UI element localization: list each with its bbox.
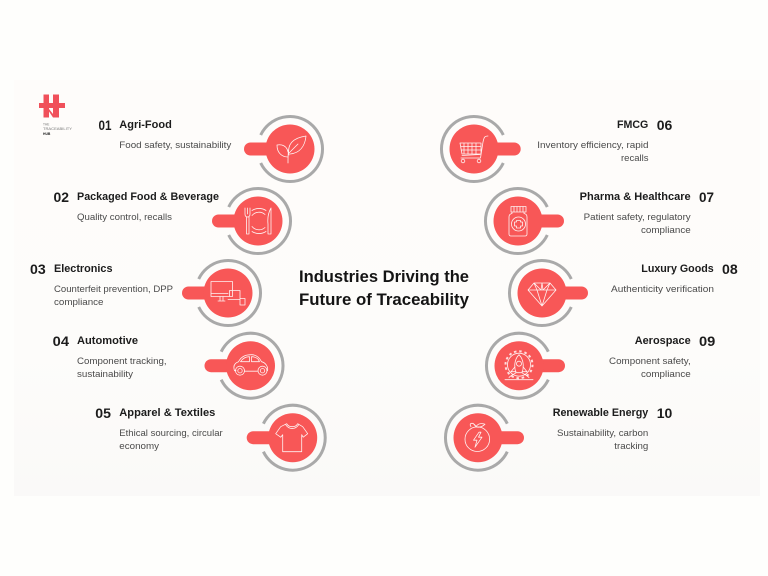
item 07: Pharma & Healthcare: Pharma & Healthcare bbox=[580, 191, 691, 203]
item 04: Automotive: sustainability bbox=[77, 369, 133, 380]
item 05: Apparel & Textiles bbox=[95, 405, 325, 470]
icon: rocket in gear bbox=[486, 333, 565, 398]
icon: t-shirt bbox=[247, 405, 325, 470]
item 10: Renewable Energy: Renewable Energy bbox=[553, 407, 649, 419]
icon: plate and cutlery bbox=[212, 188, 291, 254]
item 10: Renewable Energy bbox=[445, 405, 672, 470]
logo: The Traceability Hub: TRACEABILITY bbox=[43, 127, 73, 131]
item 07: Pharma & Healthcare bbox=[485, 188, 714, 254]
item 09: Aerospace: compliance bbox=[641, 369, 691, 380]
item 05: Apparel & Textiles: Apparel & Textiles bbox=[119, 407, 215, 419]
item 01: Agri-Food: Food safety, sustainability bbox=[119, 140, 232, 151]
item 02: Packaged Food & Beverage: Packaged Food & Beverage bbox=[77, 191, 219, 203]
item 09: Aerospace: 09 bbox=[699, 333, 716, 349]
item 07: Pharma & Healthcare: compliance bbox=[641, 225, 691, 236]
item 10: Renewable Energy: tracking bbox=[614, 441, 648, 452]
item 02: Packaged Food & Beverage bbox=[54, 188, 291, 254]
title bbox=[299, 268, 470, 309]
item 04: Automotive: Component tracking, bbox=[77, 356, 167, 367]
item 08: Luxury Goods bbox=[509, 260, 738, 326]
icon: car bbox=[204, 333, 283, 398]
item 09: Aerospace: Aerospace bbox=[635, 335, 691, 347]
item 01: Agri-Food: 01 bbox=[98, 117, 112, 133]
icon: energy bolt in fruit bbox=[445, 405, 524, 470]
item 06: FMCG: recalls bbox=[621, 153, 649, 164]
item 04: Automotive: 04 bbox=[53, 333, 69, 349]
item 01: Agri-Food: Agri-Food bbox=[119, 119, 172, 131]
icon: diamond bbox=[509, 260, 588, 326]
item 05: Apparel & Textiles: economy bbox=[119, 441, 159, 452]
item 06: FMCG: FMCG bbox=[617, 119, 648, 131]
item 10: Renewable Energy: Sustainability, carbon bbox=[557, 428, 648, 439]
logo: The Traceability Hub bbox=[39, 94, 73, 136]
item 06: FMCG: 06 bbox=[657, 117, 673, 133]
item 07: Pharma & Healthcare: 07 bbox=[699, 189, 714, 205]
logo: The Traceability Hub: HUB bbox=[43, 132, 51, 136]
item 03: Electronics: compliance bbox=[54, 297, 104, 308]
item 03: Electronics bbox=[30, 260, 261, 326]
item 01: Agri-Food bbox=[98, 116, 323, 182]
icon: shopping cart bbox=[441, 116, 521, 182]
item 03: Electronics: Electronics bbox=[54, 263, 112, 275]
item 05: Apparel & Textiles: Ethical sourcing, circular bbox=[119, 428, 223, 439]
item 08: Luxury Goods: 08 bbox=[722, 261, 738, 277]
item 08: Luxury Goods: Authenticity verification bbox=[611, 284, 714, 295]
item 04: Automotive bbox=[53, 333, 283, 398]
title: Industries Driving the bbox=[299, 268, 469, 286]
item 02: Packaged Food & Beverage: Quality control, recalls bbox=[77, 212, 172, 223]
background panel bbox=[14, 80, 760, 496]
logo: The Traceability Hub: THE bbox=[43, 122, 49, 126]
item 09: Aerospace bbox=[486, 333, 716, 398]
item 04: Automotive: Automotive bbox=[77, 335, 138, 347]
item 05: Apparel & Textiles: 05 bbox=[95, 405, 111, 421]
item 02: Packaged Food & Beverage: 02 bbox=[54, 189, 69, 205]
item 08: Luxury Goods: Luxury Goods bbox=[641, 263, 714, 275]
item 09: Aerospace: Component safety, bbox=[609, 356, 691, 367]
title: Future of Traceability bbox=[299, 291, 470, 309]
item 07: Pharma & Healthcare: Patient safety, regulatory bbox=[584, 212, 691, 223]
item 03: Electronics: Counterfeit prevention, DPP bbox=[54, 284, 173, 295]
icon: medicine bottle bbox=[485, 188, 564, 254]
item 03: Electronics: 03 bbox=[30, 261, 46, 277]
icon: plant in red circle bbox=[244, 116, 323, 182]
item 06: FMCG: Inventory efficiency, rapid bbox=[537, 140, 648, 151]
item 10: Renewable Energy: 10 bbox=[657, 405, 672, 421]
icon: computer devices bbox=[182, 260, 261, 326]
item 06: FMCG bbox=[441, 116, 673, 182]
